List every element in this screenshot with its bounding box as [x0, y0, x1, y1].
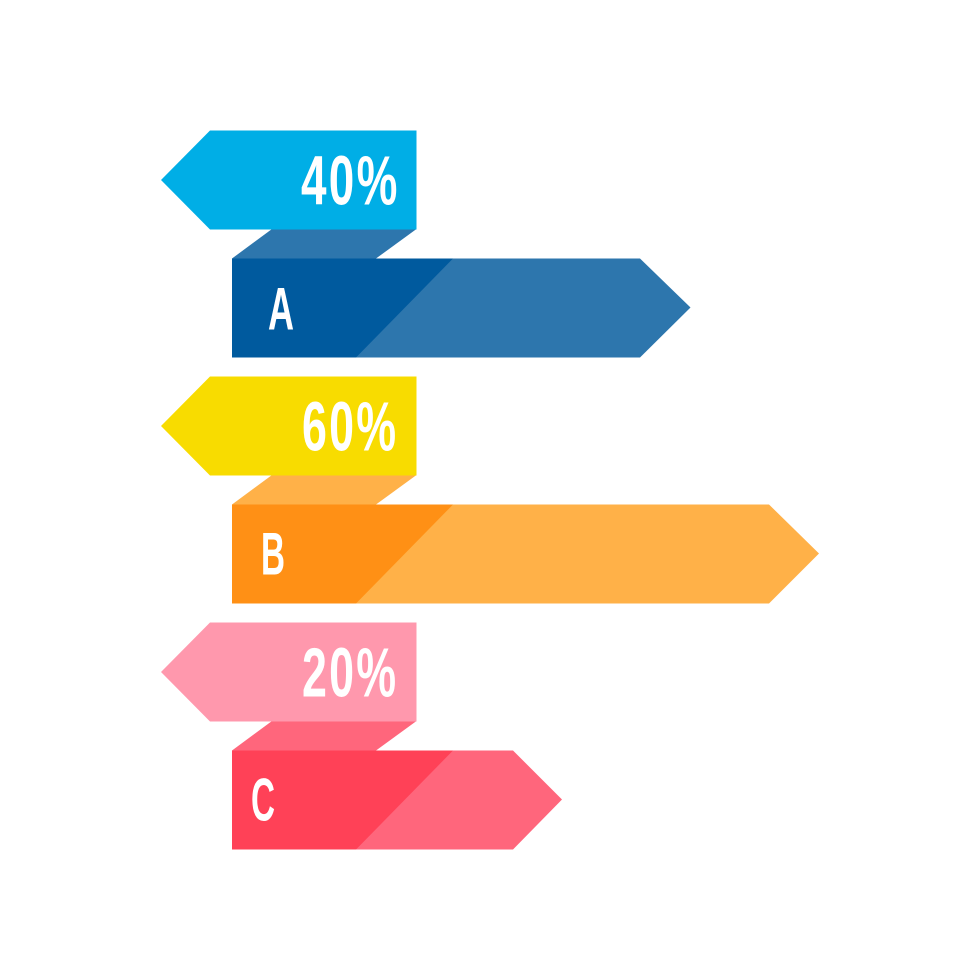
- bar B dark section: [232, 504, 453, 604]
- group A: 40%: [161, 130, 690, 358]
- value tag A: [161, 130, 416, 230]
- value 40%: 40%: [301, 141, 400, 220]
- bar B arrow: [232, 504, 819, 604]
- value 60%: 60%: [302, 389, 398, 466]
- bar A dark section: [232, 258, 453, 358]
- label C: C: [251, 766, 275, 834]
- group C: 20%: [161, 622, 562, 850]
- fold connector A: [232, 229, 416, 258]
- group B: 60%: [161, 376, 819, 604]
- bar C arrow: [232, 750, 562, 850]
- bar A arrow: [232, 258, 690, 358]
- fold connector C: [232, 721, 416, 750]
- label A: A: [268, 276, 294, 342]
- bar C dark section: [232, 750, 453, 850]
- value tag C: [161, 622, 416, 722]
- value 20%: 20%: [302, 635, 398, 712]
- fold connector B: [232, 475, 416, 504]
- label B: B: [261, 520, 285, 588]
- value tag B: [161, 376, 416, 476]
